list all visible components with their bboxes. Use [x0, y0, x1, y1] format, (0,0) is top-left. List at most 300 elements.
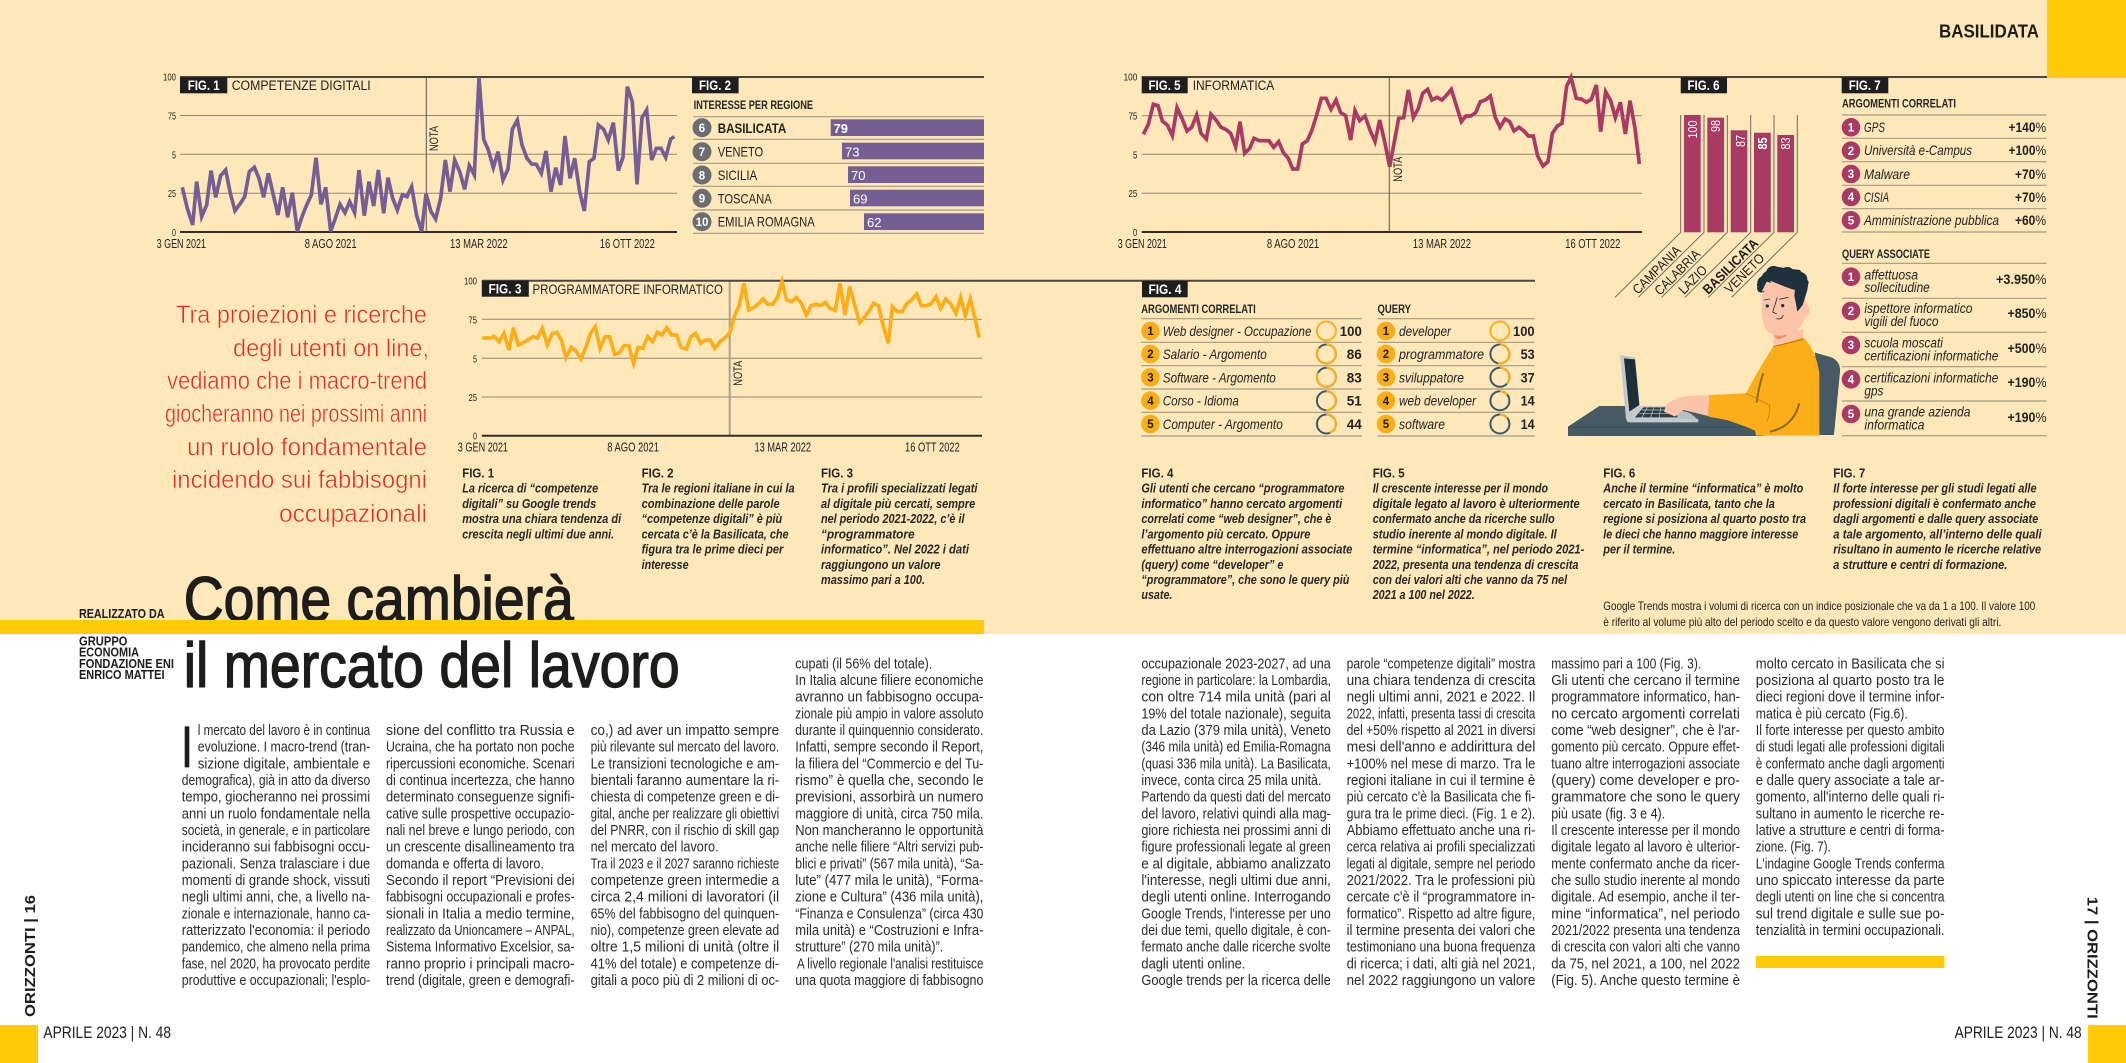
- article column 1: ratterizzato l'economia: il periodo: [182, 923, 370, 939]
- panel: fig 4 argomenti correlati e query: 5: [1383, 419, 1390, 431]
- caption: fig 2: cercata c’è la Basilicata, che: [642, 527, 789, 541]
- caption: fig 6: regione si posiziona al quarto posto tra: [1603, 512, 1806, 526]
- caption: fig 3: raggiungono un valore: [821, 558, 940, 572]
- chart: fig 3 programmatore informatico: 100: [464, 276, 477, 288]
- chart: fig 5 informatica: 75: [1128, 110, 1137, 122]
- article column 8: sultano in aumento le ricerche re-: [1756, 806, 1945, 822]
- panel: fig 7 argomenti e query: +500%: [2008, 340, 2046, 356]
- article column 8: sul trend digitale e sulle sue po-: [1756, 906, 1945, 922]
- chart: fig 5 informatica: FIG. 5: [1148, 78, 1181, 93]
- article column 1: pandemico, che almeno nella prima: [182, 940, 371, 956]
- chart: fig 5 informatica: 100: [1124, 72, 1137, 84]
- caption: fig 4: informatico” hanno cercato argomenti: [1141, 497, 1343, 511]
- caption: fig 6: [1602, 466, 1806, 557]
- caption: fig 2: FIG. 2: [642, 466, 674, 480]
- quote: red pull quote: vediamo che i macro-trend: [167, 367, 427, 395]
- chart: fig 5 informatica: 8 AGO 2021: [1267, 237, 1319, 251]
- panel: fig 2 interesse per regione: 69: [853, 192, 867, 206]
- panel: fig 7 argomenti e query: +70%: [2015, 189, 2046, 205]
- article column 7: che sullo studio inerente al mondo: [1551, 873, 1740, 889]
- panel: fig 4 argomenti correlati e query: 100: [1513, 323, 1535, 339]
- article column 6: mesi dell'anno e addirittura del: [1347, 740, 1535, 756]
- chart: fig 5 informatica: NOTA: [1393, 156, 1405, 182]
- caption: fig 4: usate.: [1141, 588, 1172, 602]
- chart: fig 3 programmatore informatico: 0: [473, 430, 477, 442]
- article column 4: avranno un fabbisogno occupa-: [795, 690, 984, 706]
- article column 2: realizzato da Unioncamere – ANPAL,: [386, 923, 575, 939]
- article column 5: del lavoro, relativi quindi alla mag-: [1141, 806, 1331, 822]
- article column 4: durante il quinquennio considerato.: [795, 723, 983, 739]
- panel: fig 4 argomenti correlati e query: Computer - Argomento: [1163, 416, 1283, 432]
- quote: red pull quote: un ruolo fondamentale: [187, 434, 427, 462]
- caption: fig 5: 2022, presenta una tendenza di crescita: [1372, 558, 1578, 572]
- article column 6: nel 2022 raggiungono un valore: [1347, 973, 1535, 989]
- panel: fig 4 argomenti correlati e query: FIG. 4: [1148, 282, 1182, 297]
- article column 1: negli ultimi anni, che, a livello na-: [182, 890, 370, 906]
- chart: fig 5 informatica: [1118, 72, 2047, 251]
- panel: fig 4 argomenti correlati e query: [1141, 281, 1535, 436]
- panel: fig 2 interesse per regione: 73: [845, 144, 859, 160]
- panel: fig 7 argomenti e query: +100%: [2008, 142, 2046, 158]
- article column 3: Tra il 2023 e il 2027 saranno richieste: [591, 856, 779, 872]
- caption: fig 6: FIG. 6: [1603, 466, 1635, 480]
- article column 1: fase, nel 2020, ha provocato perdite: [182, 956, 370, 972]
- article column 1: società, in generale, e in particolare: [182, 823, 370, 839]
- panel: fig 7 argomenti e query: certificazioni informatiche: [1864, 348, 1999, 364]
- chart: fig 6 regioni informatica: BASILICATA: [1700, 235, 1761, 297]
- article column 6: cerca relativa ai profili specializzati: [1347, 840, 1535, 856]
- caption: fig 7: Il forte interesse per gli studi legati alle: [1833, 482, 2037, 496]
- caption: fig 3: “programmatore: [821, 527, 915, 541]
- article column 3: circa 2,4 milioni di lavoratori (il: [591, 890, 779, 906]
- quote: red pull quote: occupazionali: [279, 500, 427, 528]
- chart: fig 3 programmatore informatico: PROGRAMMATORE INFORMATICO: [532, 282, 723, 297]
- article column 1: demografica), già in atto da diverso: [182, 773, 370, 789]
- heading: BASILIDATA: BASILIDATA: [1939, 20, 2039, 42]
- article column 1: anni un ruolo fondamentale nella: [182, 806, 371, 822]
- note: google trends: è riferito al volume più alto del periodo scelto e da questo valore vengono derivati gli altri.: [1603, 615, 2001, 629]
- article column 2: trend (digitale, green e demografi-: [386, 973, 575, 989]
- panel: fig 4 argomenti correlati e query: 86: [1347, 346, 1362, 362]
- article column 3: nio), competenze green elevate ad: [591, 923, 779, 939]
- article column 5: (quasi 336 mila unità). La Basilicata,: [1141, 756, 1331, 772]
- article column 8: uno spiccato interesse da parte: [1756, 873, 1944, 889]
- caption: fig 5: termine “informatica”, nel periodo 2021-: [1373, 543, 1584, 557]
- chart: fig 1 competenze digitali: 25: [168, 188, 176, 200]
- title: come cambierà il mercato del lavoro: [0, 565, 984, 701]
- caption: fig 7: FIG. 7: [1833, 466, 1865, 480]
- panel: fig 4 argomenti correlati e query: QUERY: [1378, 302, 1411, 316]
- article column 8: e dalle query associate a tale ar-: [1756, 773, 1945, 789]
- footer: right page: APRILE 2023 | N. 48: [1955, 1024, 2082, 1042]
- article column 7: digitale. Ad esempio, anche il ter-: [1551, 890, 1740, 906]
- panel: fig 7 argomenti e query: 1: [1848, 272, 1855, 284]
- article column 7: (query) come developer e pro-: [1551, 773, 1740, 789]
- article column 3: co,) ad aver un impatto sempre: [591, 723, 779, 739]
- caption: fig 5: studio inerente al mondo digitale. Il: [1373, 527, 1557, 541]
- panel: fig 2 interesse per regione: 10: [696, 217, 708, 229]
- article column 2: determinato conseguenze signifi-: [386, 790, 575, 806]
- caption: fig 5: confermato anche da ricerche sullo: [1373, 512, 1555, 526]
- article column 7: di crescita con valori alti che vanno: [1551, 940, 1740, 956]
- panel: fig 4 argomenti correlati e query: Web designer - Occupazione: [1163, 323, 1312, 339]
- article column 3: gitali a poco più di 2 milioni di oc-: [591, 973, 779, 989]
- article column 6: una chiara tendenza di crescita: [1347, 673, 1536, 689]
- caption: fig 1: [462, 466, 622, 541]
- article column 8: lative a strutture e centri di forma-: [1756, 823, 1945, 839]
- chart: fig 1 competenze digitali: 13 MAR 2022: [450, 237, 508, 251]
- panel: fig 4 argomenti correlati e query: 83: [1347, 369, 1362, 385]
- panel: fig 7 argomenti e query: Amministrazione pubblica: [1863, 212, 1999, 228]
- article column 5: da Lazio (379 mila unità), Veneto: [1141, 723, 1331, 739]
- caption: fig 3: [821, 466, 978, 587]
- byline: realizzato da: GRUPPO: [79, 634, 128, 649]
- article column 7: digitale legato al lavoro è ulterior-: [1551, 840, 1740, 856]
- article column 6: formatico”. Rispetto ad altre figure,: [1347, 906, 1535, 922]
- article column 1: momenti di grande shock, vissuti: [182, 873, 370, 889]
- article column 8: gomento, all'interno delle quali ri-: [1756, 790, 1945, 806]
- chart: fig 6 regioni informatica: 98: [1709, 120, 1723, 132]
- caption: fig 3: al digitale più cercati, sempre: [821, 497, 975, 511]
- panel: fig 2 interesse per regione: 8: [699, 170, 706, 182]
- article column 2: ripercussioni economiche. Scenari: [386, 756, 575, 772]
- corner: yellow tab top right: [2047, 0, 2126, 78]
- chart: fig 3 programmatore informatico: [458, 276, 1535, 454]
- article column 3: del PNRR, con il rischio di skill gap: [591, 823, 779, 839]
- article column 3: [591, 723, 780, 989]
- caption: fig 6: Anche il termine “informatica” è molto: [1602, 482, 1804, 496]
- chart: fig 3 programmatore informatico: 75: [468, 314, 477, 326]
- chart: fig 5 informatica: 25: [1128, 188, 1137, 200]
- chart: fig 5 informatica: 16 OTT 2022: [1565, 237, 1620, 251]
- article column 6: regioni italiane in cui il termine è: [1347, 773, 1535, 789]
- caption: fig 4: effettuano altre interrogazioni associate: [1141, 543, 1352, 557]
- article column 3: Le transizioni tecnologiche e am-: [591, 756, 779, 772]
- article column 8: posiziona al quarto posto tra le: [1756, 673, 1944, 689]
- panel: fig 7 argomenti e query: FIG. 7: [1849, 78, 1881, 93]
- chart: fig 5 informatica: 0: [1133, 227, 1137, 239]
- article column 4: anche nelle filiere “Altri servizi pub-: [795, 840, 984, 856]
- title: come cambierà il mercato del lavoro: il mercato del lavoro: [184, 631, 680, 701]
- caption: fig 7: dagli argomenti e dalle query associate: [1833, 512, 2038, 526]
- caption: fig 5: digitale legato al lavoro è ulteriormente: [1373, 497, 1580, 511]
- article column 5: (346 mila unità) ed Emilia-Romagna: [1141, 740, 1332, 756]
- panel: fig 2 interesse per regione: 9: [699, 194, 705, 206]
- article column 5: Partendo da questi dati del mercato: [1141, 790, 1331, 806]
- article column 2: domanda e offerta di lavoro.: [386, 856, 544, 872]
- panel: fig 7 argomenti e query: CISIA: [1864, 189, 1889, 205]
- article column 4: previsioni, assorbirà un numero: [795, 790, 983, 806]
- article column 3: 41% del totale) e competenze di-: [591, 956, 779, 972]
- article column 2: Ucraina, che ha portato non poche: [386, 740, 575, 756]
- article column 3: bientali faranno aumentare la ri-: [591, 773, 779, 789]
- article column 8: tenzialità in termini occupazionali.: [1756, 923, 1944, 939]
- caption: fig 6: le dieci che hanno maggiore interesse: [1603, 527, 1798, 541]
- article column 4: una quota maggiore di fabbisogno: [795, 973, 983, 989]
- caption: fig 3: FIG. 3: [821, 466, 853, 480]
- footer: left page: APRILE 2023 | N. 48: [43, 1024, 171, 1042]
- article column 6: +100% nel mese di marzo. Tra le: [1347, 756, 1535, 772]
- footer: right page: [1955, 897, 2126, 1063]
- article column 2: [386, 723, 575, 989]
- caption: fig 3: informatico”. Nel 2022 i dati: [821, 543, 969, 557]
- panel: fig 7 argomenti e query: certificazioni informatiche: [1864, 370, 1999, 386]
- panel: fig 4 argomenti correlati e query: 4: [1383, 396, 1390, 408]
- caption: fig 5: [1372, 466, 1584, 602]
- chart: fig 1 competenze digitali: 3 GEN 2021: [157, 237, 206, 251]
- article column 2: nali nel breve e lungo periodo, con: [386, 823, 575, 839]
- panel: fig 7 argomenti e query: ARGOMENTI CORRELATI: [1842, 96, 1956, 110]
- chart: fig 5 informatica: 3 GEN 2021: [1118, 237, 1167, 251]
- article column 5: Google trends per la ricerca delle: [1141, 973, 1331, 989]
- article column 1: evoluzione. I macro-trend (tran-: [198, 740, 370, 756]
- article column 4: [795, 656, 984, 989]
- article column 5: giore richiesta nei prossimi anni di: [1141, 823, 1331, 839]
- caption: fig 6: cercato in Basilicata, tanto che la: [1603, 497, 1775, 511]
- panel: fig 7 argomenti e query: 2: [1848, 146, 1854, 158]
- article column 5: invece, conta circa 25 mila unità.: [1141, 773, 1321, 789]
- panel: fig 7 argomenti e query: +850%: [2008, 305, 2046, 321]
- article column 5: [1141, 656, 1332, 989]
- article column 4: zione e Cultura” (436 mila unità),: [795, 890, 983, 906]
- panel: fig 7 argomenti e query: 4: [1848, 374, 1855, 386]
- caption: fig 1: mostra una chiara tendenza di: [462, 512, 622, 526]
- chart: fig 3 programmatore informatico: 16 OTT 2022: [905, 440, 960, 454]
- panel: fig 7 argomenti e query: QUERY ASSOCIATE: [1842, 247, 1930, 261]
- caption: fig 4: (query) come “developer” e: [1141, 558, 1283, 572]
- article column 3: nel mercato del lavoro.: [591, 840, 719, 856]
- panel: fig 4 argomenti correlati e query: 2: [1147, 349, 1154, 361]
- article column 8: è confermato anche dagli argomenti: [1756, 756, 1944, 772]
- article column 2: Secondo il report “Previsioni dei: [386, 873, 575, 889]
- caption: fig 4: [1141, 466, 1352, 602]
- panel: fig 7 argomenti e query: [1842, 77, 2046, 436]
- panel: fig 4 argomenti correlati e query: programmatore: [1398, 346, 1484, 362]
- panel: fig 4 argomenti correlati e query: sviluppatore: [1399, 369, 1464, 385]
- article column 4: cupati (il 56% del totale).: [795, 656, 932, 672]
- chart: fig 1 competenze digitali: NOTA: [429, 126, 441, 151]
- panel: fig 4 argomenti correlati e query: Software - Argomento: [1163, 369, 1276, 385]
- chart: fig 1 competenze digitali: 100: [163, 72, 176, 84]
- panel: fig 7 argomenti e query: scuola moscati: [1864, 334, 1944, 350]
- article column 5: fermato anche dalle ricerche svolte: [1141, 940, 1331, 956]
- chart: fig 6 regioni informatica: VENETO: [1722, 250, 1767, 296]
- caption: fig 2: [642, 466, 795, 572]
- article column 8: molto cercato in Basilicata che si: [1756, 656, 1944, 672]
- panel: fig 4 argomenti correlati e query: web developer: [1399, 393, 1477, 409]
- caption: fig 4: FIG. 4: [1141, 466, 1174, 480]
- panel: fig 4 argomenti correlati e query: 53: [1521, 346, 1535, 362]
- article column 1: incideranno sui fabbisogni occu-: [182, 840, 370, 856]
- article column 3: competenze green intermedie a: [591, 873, 780, 889]
- note: google trends: [1603, 599, 2036, 629]
- caption: fig 2: figura tra le prime dieci per: [642, 543, 784, 557]
- panel: fig 7 argomenti e query: Università e-Campus: [1864, 142, 1972, 158]
- caption: fig 3: massimo pari a 100.: [821, 573, 925, 587]
- chart: fig 3 programmatore informatico: FIG. 3: [488, 282, 522, 296]
- panel: fig 7 argomenti e query: 4: [1848, 192, 1855, 204]
- panel: fig 7 argomenti e query: +3.950%: [1996, 271, 2046, 287]
- article column 6: parole “competenze digitali” mostra: [1347, 656, 1536, 672]
- panel: fig 2 interesse per regione: 62: [867, 215, 881, 230]
- article column 6: più cercato c'è la Basilicata che fi-: [1347, 790, 1535, 806]
- panel: fig 4 argomenti correlati e query: 14: [1521, 416, 1535, 432]
- article column 7: Gli utenti che cercano il termine: [1551, 673, 1740, 689]
- article column 6: testimoniano una buona frequenza: [1347, 940, 1536, 956]
- panel: fig 7 argomenti e query: +190%: [2008, 409, 2046, 425]
- article column 6: cercate c'è il “programmatore in-: [1347, 890, 1535, 906]
- article column 7: gomento più cercato. Oppure effet-: [1551, 740, 1740, 756]
- article column 4: lute” (477 mila le unità), “Forma-: [795, 873, 984, 889]
- panel: fig 7 argomenti e query: 5: [1848, 216, 1855, 228]
- caption: fig 7: professioni digitali è confermato anche: [1832, 497, 2036, 511]
- article column 7: tuano altre interrogazioni associate: [1551, 756, 1740, 772]
- chart: fig 1 competenze digitali: [157, 72, 984, 251]
- panel: fig 7 argomenti e query: vigili del fuoco: [1864, 313, 1939, 329]
- panel: fig 7 argomenti e query: +60%: [2015, 212, 2046, 228]
- article column 3: più rilevante sul mercato del lavoro.: [591, 740, 779, 756]
- byline: realizzato da: ECONOMIA: [79, 645, 140, 660]
- caption: fig 1: digitali” su Google trends: [462, 497, 596, 511]
- panel: fig 2 interesse per regione: 79: [834, 121, 848, 136]
- article column 3: 65% del fabbisogno del quinquen-: [591, 906, 779, 922]
- caption: fig 7: risultano in aumento le ricerche relative: [1833, 543, 2041, 557]
- chart: fig 6 regioni informatica: 85: [1756, 137, 1770, 150]
- article column 6: il termine presenta dei valori che: [1347, 923, 1535, 939]
- article column 7: (Fig. 5). Anche questo termine è: [1551, 973, 1740, 989]
- panel: fig 7 argomenti e query: gps: [1864, 382, 1883, 398]
- chart: fig 6 regioni informatica: 83: [1779, 137, 1793, 150]
- panel: fig 4 argomenti correlati e query: ARGOMENTI CORRELATI: [1141, 302, 1256, 316]
- article column 3: oltre 1,5 milioni di unità (oltre il: [591, 940, 779, 956]
- panel: fig 2 interesse per regione: EMILIA ROMAGNA: [718, 214, 815, 230]
- article column 7: massimo pari a 100 (Fig. 3).: [1551, 656, 1701, 672]
- article column 7: 2021/2022 presenta una tendenza: [1551, 923, 1741, 939]
- article column 2: Sistema Informativo Excelsior, sa-: [386, 940, 575, 956]
- article column 7: grammatore che sono le query: [1551, 790, 1741, 806]
- article column 7: da 75, nel 2021, a 100, nel 2022: [1551, 956, 1740, 972]
- caption: fig 1: crescita negli ultimi due anni.: [462, 527, 614, 541]
- caption: fig 2: “competenze digitali” è più: [642, 512, 782, 526]
- panel: fig 7 argomenti e query: Malware: [1864, 166, 1910, 182]
- panel: fig 2 interesse per regione: BASILICATA: [718, 120, 786, 136]
- article column 4: strutture” (270 mila unità)”.: [795, 940, 943, 956]
- panel: fig 7 argomenti e query: +70%: [2015, 166, 2046, 182]
- quote: red pull quote: degli utenti on line,: [233, 334, 429, 362]
- panel: fig 7 argomenti e query: una grande azienda: [1864, 404, 1971, 420]
- article column 8: Il forte interesse per questo ambito: [1756, 723, 1944, 739]
- article column 5: dagli utenti online.: [1141, 956, 1245, 972]
- quote: red pull quote: Tra proiezioni e ricerche: [176, 301, 427, 329]
- article column 5: Google Trends, l'interesse per uno: [1141, 906, 1331, 922]
- panel: fig 4 argomenti correlati e query: 51: [1347, 393, 1362, 409]
- article column 6: del +50% rispetto al 2021 in diversi: [1347, 723, 1535, 739]
- caption: fig 1: FIG. 1: [462, 466, 494, 480]
- article column 8: L'indagine Google Trends conferma: [1756, 856, 1945, 872]
- chart: fig 1 competenze digitali: 75: [168, 110, 176, 122]
- article column 5: occupazionale 2023-2027, ad una: [1141, 656, 1332, 672]
- article column 7: più usate (fig. 3 e 4).: [1551, 806, 1665, 822]
- article column 5: degli utenti online. Interrogando: [1141, 890, 1331, 906]
- article column 2: di continua incertezza, che hanno: [386, 773, 575, 789]
- article column 6: Abbiamo effettuato anche una ri-: [1347, 823, 1535, 839]
- panel: fig 4 argomenti correlati e query: software: [1399, 416, 1445, 432]
- panel: fig 2 interesse per regione: TOSCANA: [718, 190, 772, 206]
- title: come cambierà il mercato del lavoro: Come cambierà: [184, 565, 575, 635]
- caption: fig 6: per il termine.: [1602, 543, 1675, 557]
- article column 4: zionale più ampio in valore assoluto: [795, 706, 983, 722]
- chart: fig 6 regioni informatica: LAZIO: [1676, 262, 1710, 297]
- panel: fig 4 argomenti correlati e query: 5: [1147, 419, 1154, 431]
- panel: fig 2 interesse per regione: VENETO: [718, 144, 763, 160]
- panel: fig 7 argomenti e query: 1: [1848, 122, 1855, 134]
- panel: fig 7 argomenti e query: +190%: [2008, 374, 2046, 390]
- article column 5: figure professionali legate al green: [1141, 840, 1331, 856]
- panel: fig 4 argomenti correlati e query: 14: [1521, 393, 1535, 409]
- panel: fig 4 argomenti correlati e query: 100: [1340, 323, 1362, 339]
- caption: fig 2: interesse: [642, 558, 689, 572]
- panel: fig 7 argomenti e query: GPS: [1864, 119, 1885, 135]
- illustration: man working at laptop: [1568, 266, 1840, 436]
- panel: fig 4 argomenti correlati e query: 44: [1347, 416, 1362, 432]
- chart: fig 1 competenze digitali: COMPETENZE DIGITALI: [232, 78, 371, 93]
- article column 8: di studi legati alle professioni digitali: [1756, 740, 1944, 756]
- article column 1: produttive e occupazionali; l'esplo-: [182, 973, 370, 989]
- article column 6: [1347, 656, 1536, 989]
- chart: fig 6 regioni informatica: 87: [1734, 135, 1748, 147]
- article column 6: 2022, infatti, presenta tassi di crescita: [1347, 706, 1536, 722]
- article column 1: pazionali. Senza tralasciare i due: [182, 856, 370, 872]
- article column 4: Infatti, sempre secondo il Report,: [795, 740, 983, 756]
- byline: realizzato da: FONDAZIONE ENI: [79, 656, 174, 671]
- article column 2: ranno proprio i principali macro-: [386, 956, 575, 972]
- chart: fig 5 informatica: 5: [1133, 150, 1137, 162]
- article column 7: come “web designer”, che è l'ar-: [1551, 723, 1740, 739]
- article column 1: I: [181, 715, 193, 780]
- chart: fig 1 competenze digitali: 8 AGO 2021: [305, 237, 357, 251]
- article column 4: la filiera del “Commercio e del Tu-: [795, 756, 984, 772]
- caption: fig 4: Gli utenti che cercano “programmatore: [1141, 482, 1344, 496]
- panel: fig 4 argomenti correlati e query: 37: [1521, 369, 1535, 385]
- chart: fig 3 programmatore informatico: NOTA: [733, 360, 745, 386]
- panel: fig 7 argomenti e query: 3: [1848, 169, 1854, 181]
- chart: fig 6 regioni informatica: [1615, 77, 1797, 298]
- panel: fig 7 argomenti e query: +140%: [2008, 119, 2046, 135]
- caption: fig 3: Tra i profili specializzati legati: [821, 482, 978, 496]
- panel: fig 2 interesse per regione: 70: [851, 168, 865, 183]
- chart: fig 6 regioni informatica: FIG. 6: [1688, 78, 1720, 93]
- footer: left page: ORIZZONTI | 16: [22, 895, 39, 1017]
- caption: fig 2: combinazione delle parole: [642, 497, 780, 511]
- caption: fig 2: Tra le regioni italiane in cui la: [642, 482, 795, 496]
- chart: fig 6 regioni informatica: CAMPANIA: [1630, 243, 1684, 297]
- panel: fig 2 interesse per regione: [692, 77, 984, 233]
- article column 2: sionali in Italia a medio termine,: [386, 906, 575, 922]
- panel: fig 7 argomenti e query: ispettore informatico: [1864, 300, 1973, 316]
- article column 4: mila unità) e “Costruzioni e Infra-: [795, 923, 984, 939]
- chart: fig 1 competenze digitali: 0: [172, 227, 176, 239]
- article column 2: un crescente disallineamento tra: [386, 840, 575, 856]
- footer: right page: 17 | ORIZZONTI: [2084, 897, 2100, 1019]
- panel: fig 4 argomenti correlati e query: 1: [1383, 326, 1390, 338]
- panel: fig 2 interesse per regione: FIG. 2: [699, 78, 731, 93]
- article column 7: Il crescente interesse per il mondo: [1551, 823, 1740, 839]
- chart: fig 1 competenze digitali: 5: [172, 150, 176, 162]
- article column 2: cative sulle prospettive occupazio-: [386, 806, 575, 822]
- article column 3: chiesta di competenze green e di-: [591, 790, 779, 806]
- article column 8: zione. (Fig. 7).: [1756, 840, 1831, 856]
- chart: fig 1 competenze digitali: FIG. 1: [188, 78, 220, 93]
